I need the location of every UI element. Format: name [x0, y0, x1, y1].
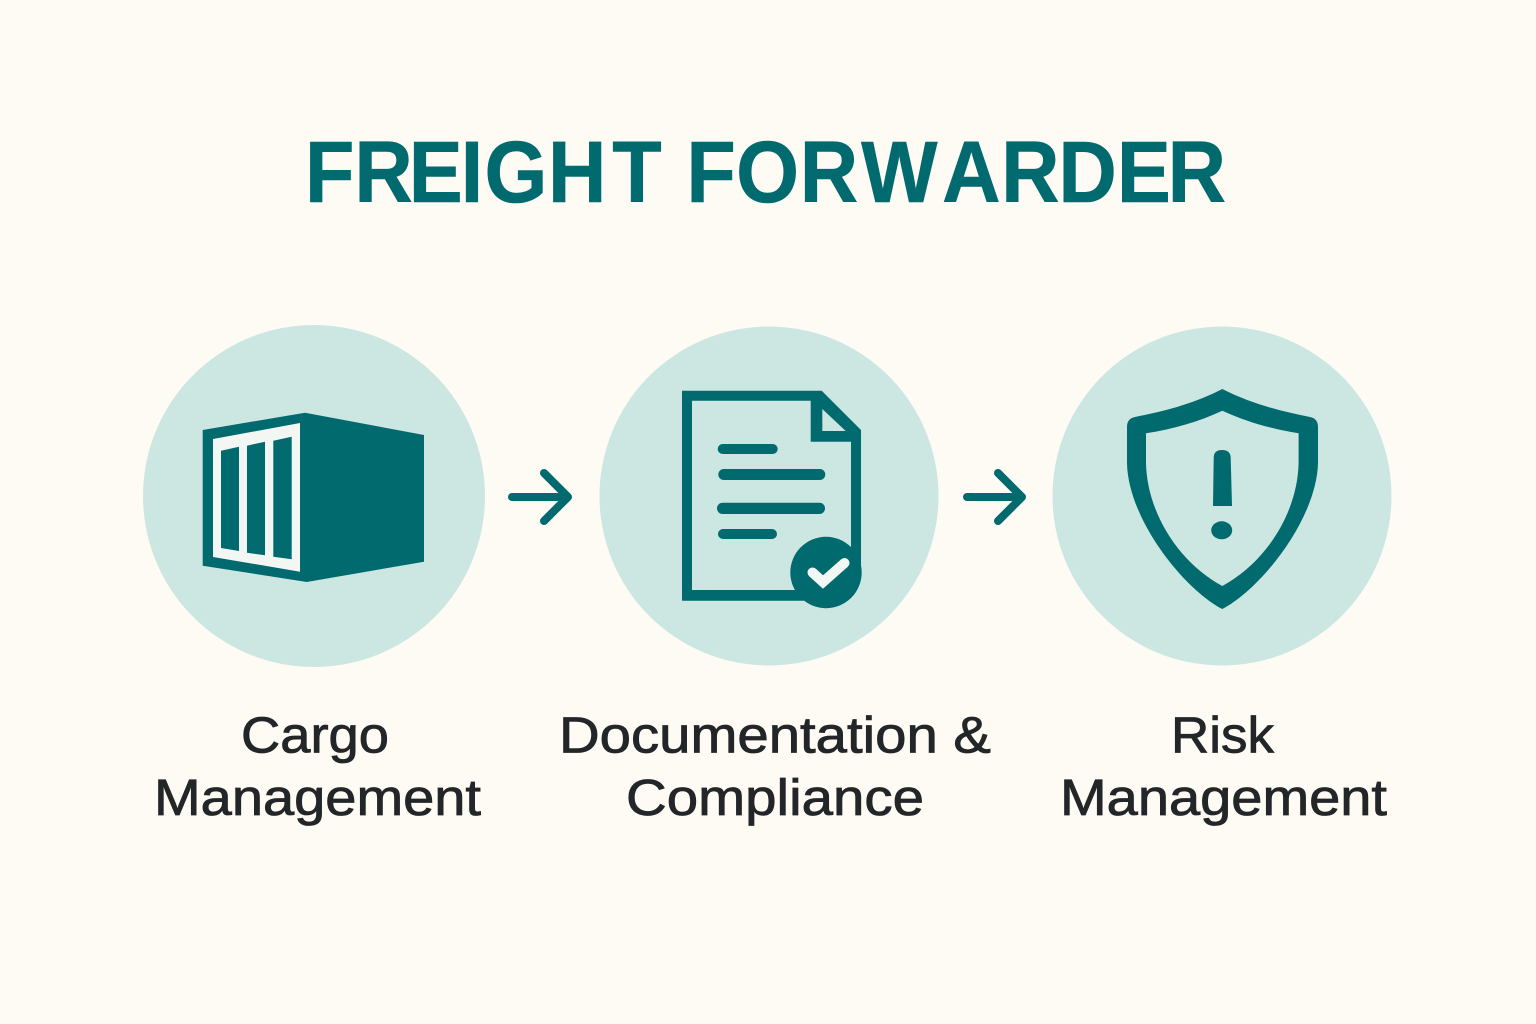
label: cargo management [154, 706, 481, 826]
label: documentation and compliance [559, 706, 991, 826]
label: risk management: Management [1060, 769, 1387, 826]
circle: documentation background [600, 326, 938, 666]
label: documentation and compliance: Documentation & [559, 706, 991, 764]
icon: shield with exclamation [1127, 389, 1318, 609]
arrow: documentation to risk [967, 473, 1022, 521]
circle: risk background [1052, 326, 1392, 666]
title: FREIGHT FORWARDER [305, 123, 1226, 221]
arrow: cargo to documentation [512, 473, 568, 521]
label: risk management: Risk [1171, 706, 1275, 764]
panel: documentation and compliance [559, 326, 991, 826]
panel: risk management [1052, 326, 1392, 826]
label: documentation and compliance: Compliance [626, 769, 924, 826]
icon: shipping container [203, 413, 424, 582]
panel: cargo management [143, 325, 485, 826]
icon: document with check [682, 391, 862, 608]
circle: cargo background [143, 325, 485, 667]
label: cargo management: Cargo [241, 706, 389, 764]
label: cargo management: Management [154, 769, 481, 826]
label: risk management [1060, 706, 1387, 826]
